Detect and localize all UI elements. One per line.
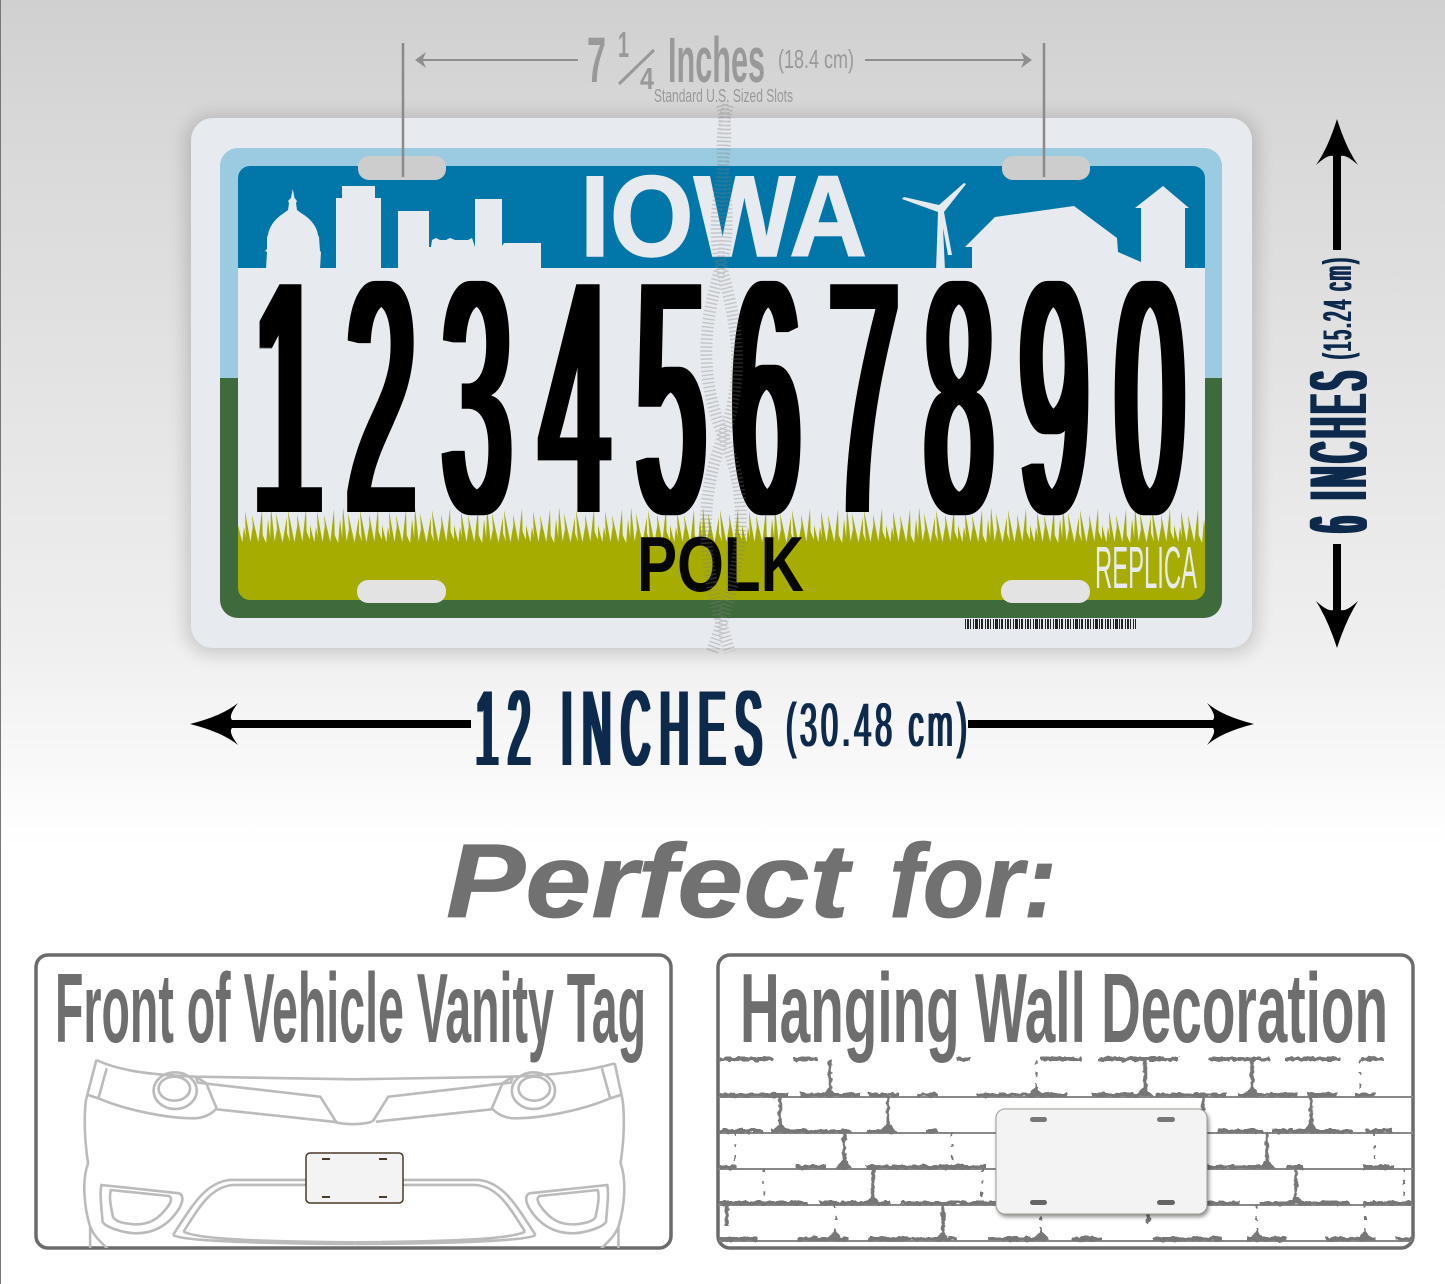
plate base [191, 118, 1252, 648]
heading: perfect for: Perfect [446, 823, 854, 940]
slots caption: Standard U.S. Sized Slots [654, 86, 793, 106]
wall plate shadow [997, 1111, 1209, 1217]
down arrow [1316, 544, 1358, 648]
right slot guide [1043, 43, 1045, 177]
wind turbine [902, 183, 966, 270]
left arrow [190, 703, 471, 745]
left arrow [415, 52, 578, 68]
state name: IOWA [580, 153, 867, 281]
width label: 12 INCHES [476, 670, 762, 789]
up arrow [1316, 119, 1358, 250]
blue sky band [238, 166, 1205, 270]
height label: 6 INCHES [1292, 372, 1383, 532]
heading: perfect for: for: [889, 823, 1057, 940]
skyline silhouette [265, 186, 541, 269]
measurement label [587, 24, 854, 96]
height dimension [1292, 119, 1383, 648]
measurement label: 4 [640, 61, 655, 96]
heading: perfect for [446, 823, 1057, 940]
panel frame [718, 955, 1413, 1248]
panel: front of vehicle vanity tag [36, 953, 671, 1250]
outer border sky and green [220, 148, 1222, 618]
measurement label: 7 [587, 24, 606, 96]
grass blades [238, 505, 1205, 545]
small blank plate on car [306, 1153, 403, 1203]
plate number: 1234567890 [254, 212, 1184, 582]
width metric label: (30.48 cm) [786, 692, 967, 760]
brick wall [718, 1059, 1413, 1241]
county name: POLK [637, 520, 804, 608]
license plate: REPLICA [1095, 535, 1197, 601]
plate drop shadow [186, 116, 1257, 654]
olive grass ground [238, 543, 1205, 600]
panel: hanging wall decoration [718, 953, 1413, 1248]
right arrow [968, 703, 1254, 745]
blank plate on wall [996, 1109, 1207, 1214]
barcode [965, 619, 1136, 629]
text: Front of Vehicle Vanity Tag [55, 953, 646, 1063]
measurement label: 1 [618, 24, 629, 65]
slot spacing dimension [403, 24, 1044, 177]
width dimension [190, 670, 1254, 789]
barn and silo [965, 186, 1189, 270]
measurement label: (18.4 cm) [778, 44, 854, 74]
license plate [191, 105, 1252, 652]
measurement label: Inches [668, 24, 765, 96]
white centre band [238, 268, 1205, 548]
hologram security strip [706, 105, 741, 652]
right arrow [865, 52, 1032, 68]
car line drawing [84, 1060, 624, 1250]
height metric label: (15.24 cm) [1316, 258, 1360, 359]
left slot guide [402, 43, 404, 177]
mounting slots [357, 156, 1090, 603]
panel frame [36, 955, 671, 1248]
